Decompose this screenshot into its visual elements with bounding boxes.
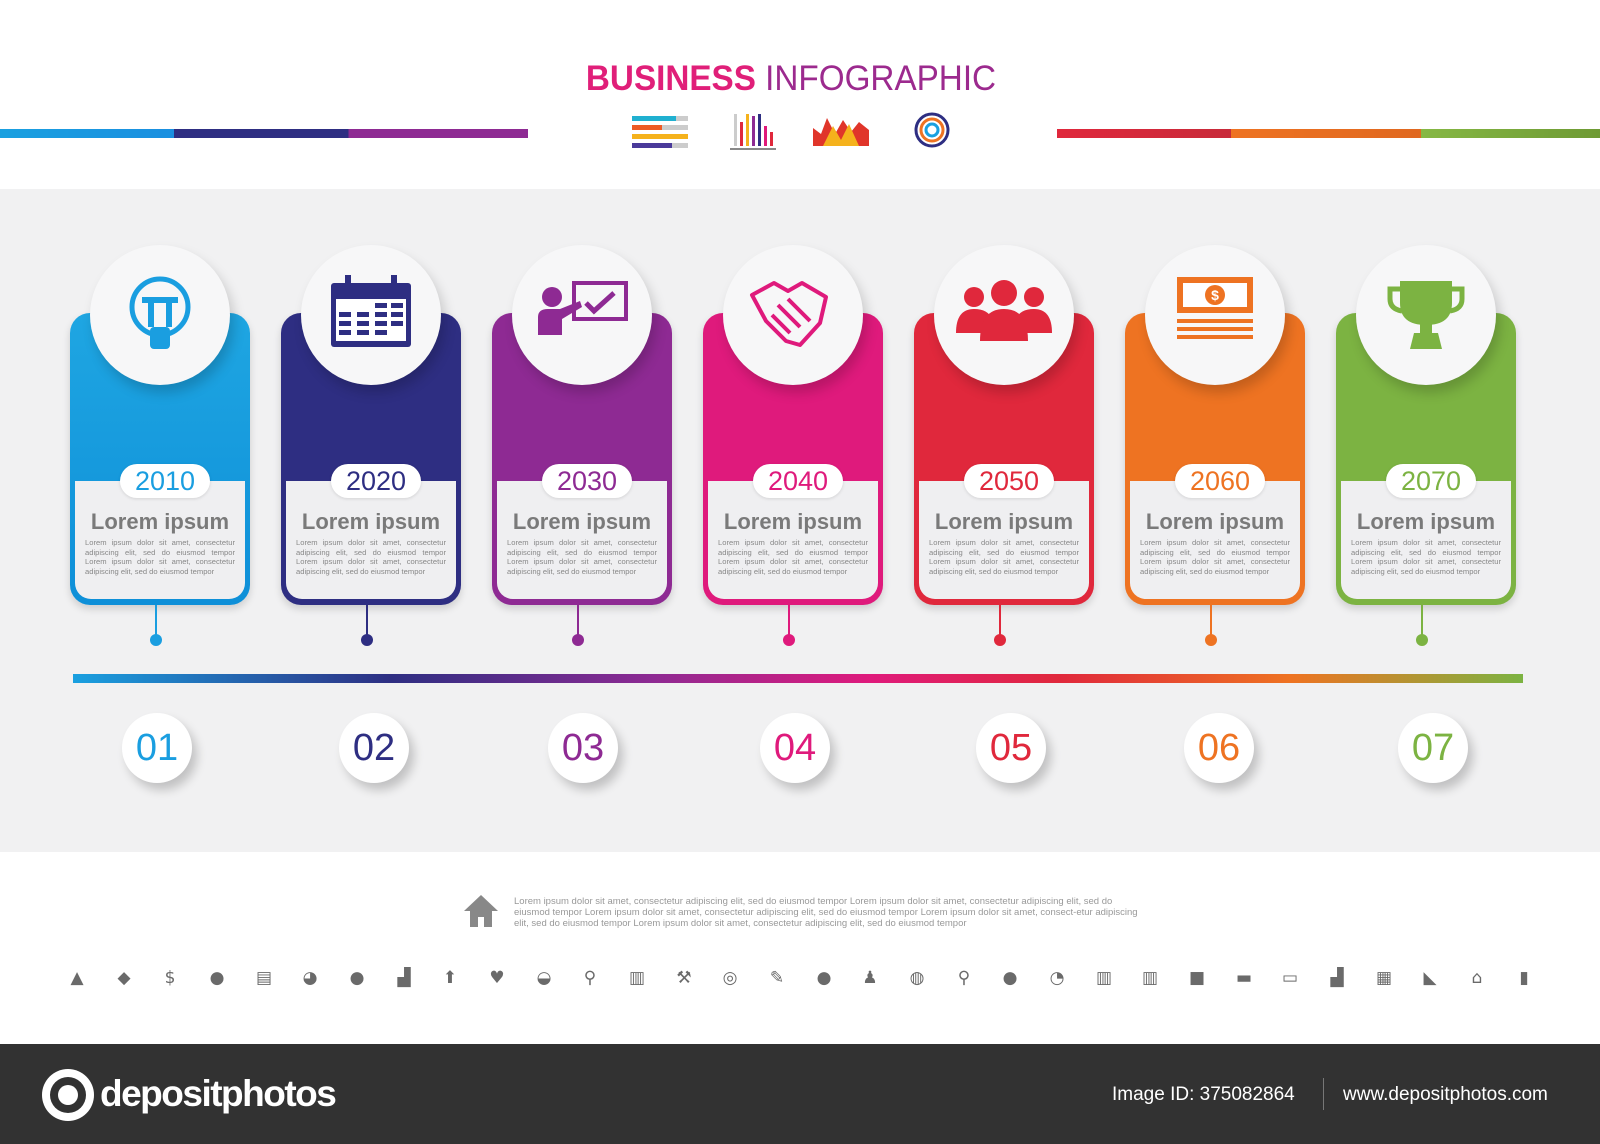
right colour bar	[1057, 129, 1600, 138]
icon row: ⚒	[676, 968, 692, 988]
icon row: ▥	[1096, 968, 1112, 988]
card 2: Lorem ipsum	[302, 509, 440, 534]
card 6: Lorem ipsum dolor sit amet, consectetur adipiscing elit, sed do eiusmod tempor Lorem ipsum dolor sit amet, consectetur adipiscing elit, sed do eiusmod tempor	[1140, 538, 1290, 576]
icon row: ♥	[489, 968, 505, 988]
card 3: Lorem ipsum	[513, 509, 651, 534]
card 1: Lorem ipsum	[91, 509, 229, 534]
icon row: ●	[1003, 968, 1017, 988]
footer url: www.depositphotos.com	[1343, 1084, 1548, 1105]
icon row: ◆	[117, 968, 131, 988]
icon row: ▲	[70, 968, 84, 988]
card 5	[914, 313, 1094, 605]
card 5: Lorem ipsum dolor sit amet, consectetur adipiscing elit, sed do eiusmod tempor Lorem ipsum dolor sit amet, consectetur adipiscing elit, sed do eiusmod tempor	[929, 538, 1079, 576]
card 3: Lorem ipsum dolor sit amet, consectetur adipiscing elit, sed do eiusmod tempor Lorem ipsum dolor sit amet, consectetur adipiscing elit, sed do eiusmod tempor	[507, 538, 657, 576]
icon row: ✎	[770, 968, 784, 988]
icon row: ▟	[397, 968, 411, 988]
card 2: Lorem ipsum dolor sit amet, consectetur adipiscing elit, sed do eiusmod tempor Lorem ipsum dolor sit amet, consectetur adipiscing elit, sed do eiusmod tempor	[296, 538, 446, 576]
footer image id: Image ID: 375082864	[1112, 1084, 1295, 1105]
step numbers	[122, 713, 1478, 794]
icon row: ◍	[910, 968, 924, 988]
icon row: ●	[210, 968, 224, 988]
icon row: ⚲	[958, 968, 970, 988]
step numbers: 02	[353, 727, 395, 769]
icon row: ⌂	[1472, 968, 1482, 988]
card 3: 2030	[557, 466, 617, 496]
icon row: ◒	[537, 968, 551, 988]
icon row: ⬆	[443, 968, 457, 988]
connector stems and dots	[150, 605, 1428, 646]
icon row: ▤	[256, 968, 272, 988]
card 5: Lorem ipsum	[935, 509, 1073, 534]
card 4: Lorem ipsum dolor sit amet, consectetur adipiscing elit, sed do eiusmod tempor Lorem ipsum dolor sit amet, consectetur adipiscing elit, sed do eiusmod tempor	[718, 538, 868, 576]
left colour bar	[0, 129, 528, 138]
card 1: Lorem ipsum dolor sit amet, consectetur adipiscing elit, sed do eiusmod tempor Lorem ipsum dolor sit amet, consectetur adipiscing elit, sed do eiusmod tempor	[85, 538, 235, 576]
icon row: ◎	[723, 968, 737, 988]
step numbers: 01	[136, 727, 178, 769]
icon row: ▥	[1142, 968, 1158, 988]
step numbers: 04	[774, 727, 816, 769]
step numbers: 03	[562, 727, 604, 769]
icon row: ●	[350, 968, 364, 988]
icon row: $	[165, 968, 175, 988]
icon row: ⚲	[584, 968, 596, 988]
footer logo: depositphotos	[100, 1073, 335, 1114]
icon row: ◔	[1050, 968, 1064, 988]
icon row: ▬	[1236, 968, 1252, 988]
card 3	[492, 313, 672, 605]
card 4: 2040	[768, 466, 828, 496]
card 4	[703, 313, 883, 605]
icon row: ◣	[1423, 968, 1437, 988]
step numbers: 07	[1412, 727, 1454, 769]
icon: presentation	[512, 245, 652, 385]
card 6: 2060	[1190, 466, 1250, 496]
card 2: 2020	[346, 466, 406, 496]
card 1	[70, 313, 250, 605]
icon row: ▟	[1330, 968, 1344, 988]
card 5: 2050	[979, 466, 1039, 496]
icon: house	[464, 895, 498, 927]
icon row: ◕	[303, 968, 317, 988]
icon row	[70, 967, 1529, 988]
icon row: ▭	[1282, 968, 1298, 988]
icon: calendar	[301, 245, 441, 385]
card 7	[1336, 313, 1516, 605]
icon row: ●	[817, 968, 831, 988]
card 4: Lorem ipsum	[724, 509, 862, 534]
gray panel	[0, 189, 1600, 852]
title: BUSINESS INFOGRAPHIC	[586, 59, 996, 98]
icon: handshake	[723, 245, 863, 385]
card 7: Lorem ipsum	[1357, 509, 1495, 534]
icon: trophy	[1356, 245, 1496, 385]
step numbers: 06	[1198, 727, 1240, 769]
card 1: 2010	[135, 466, 195, 496]
card 2	[281, 313, 461, 605]
icon row: ■	[1189, 968, 1205, 988]
footer bar	[0, 1044, 1600, 1144]
icon row: ▮	[1519, 968, 1529, 988]
card 6: Lorem ipsum	[1146, 509, 1284, 534]
icon: money: $	[1211, 287, 1219, 303]
icon: bulb	[90, 245, 230, 385]
bottom text block: Lorem ipsum dolor sit amet, consectetur adipiscing elit, sed do eiusmod tempor Lorem ipsum dolor sit amet, consectetur adipiscing elit, sed do eiusmod tempor Lorem ipsum dolor sit amet, consectetur adipiscing elit, sed do eiusmod tempor Lorem ipsum dolor sit amet, consect-etur adipiscing elit, sed do eiusmod tempor Lorem ipsum dolor sit amet, consectetur adipiscing elit, sed do eiusmod tempor	[514, 896, 1138, 929]
step numbers: 05	[990, 727, 1032, 769]
header chart icons	[632, 112, 950, 150]
card 6	[1125, 313, 1305, 605]
card 7: 2070	[1401, 466, 1461, 496]
icon row: ♟	[862, 968, 878, 988]
icon row: ▥	[629, 968, 645, 988]
icon: people	[934, 245, 1074, 385]
timeline gradient line	[73, 674, 1523, 683]
icon row: ▦	[1376, 968, 1392, 988]
icon: money	[1145, 245, 1285, 385]
card 7: Lorem ipsum dolor sit amet, consectetur adipiscing elit, sed do eiusmod tempor Lorem ipsum dolor sit amet, consectetur adipiscing elit, sed do eiusmod tempor	[1351, 538, 1501, 576]
footer logo	[42, 1069, 336, 1121]
